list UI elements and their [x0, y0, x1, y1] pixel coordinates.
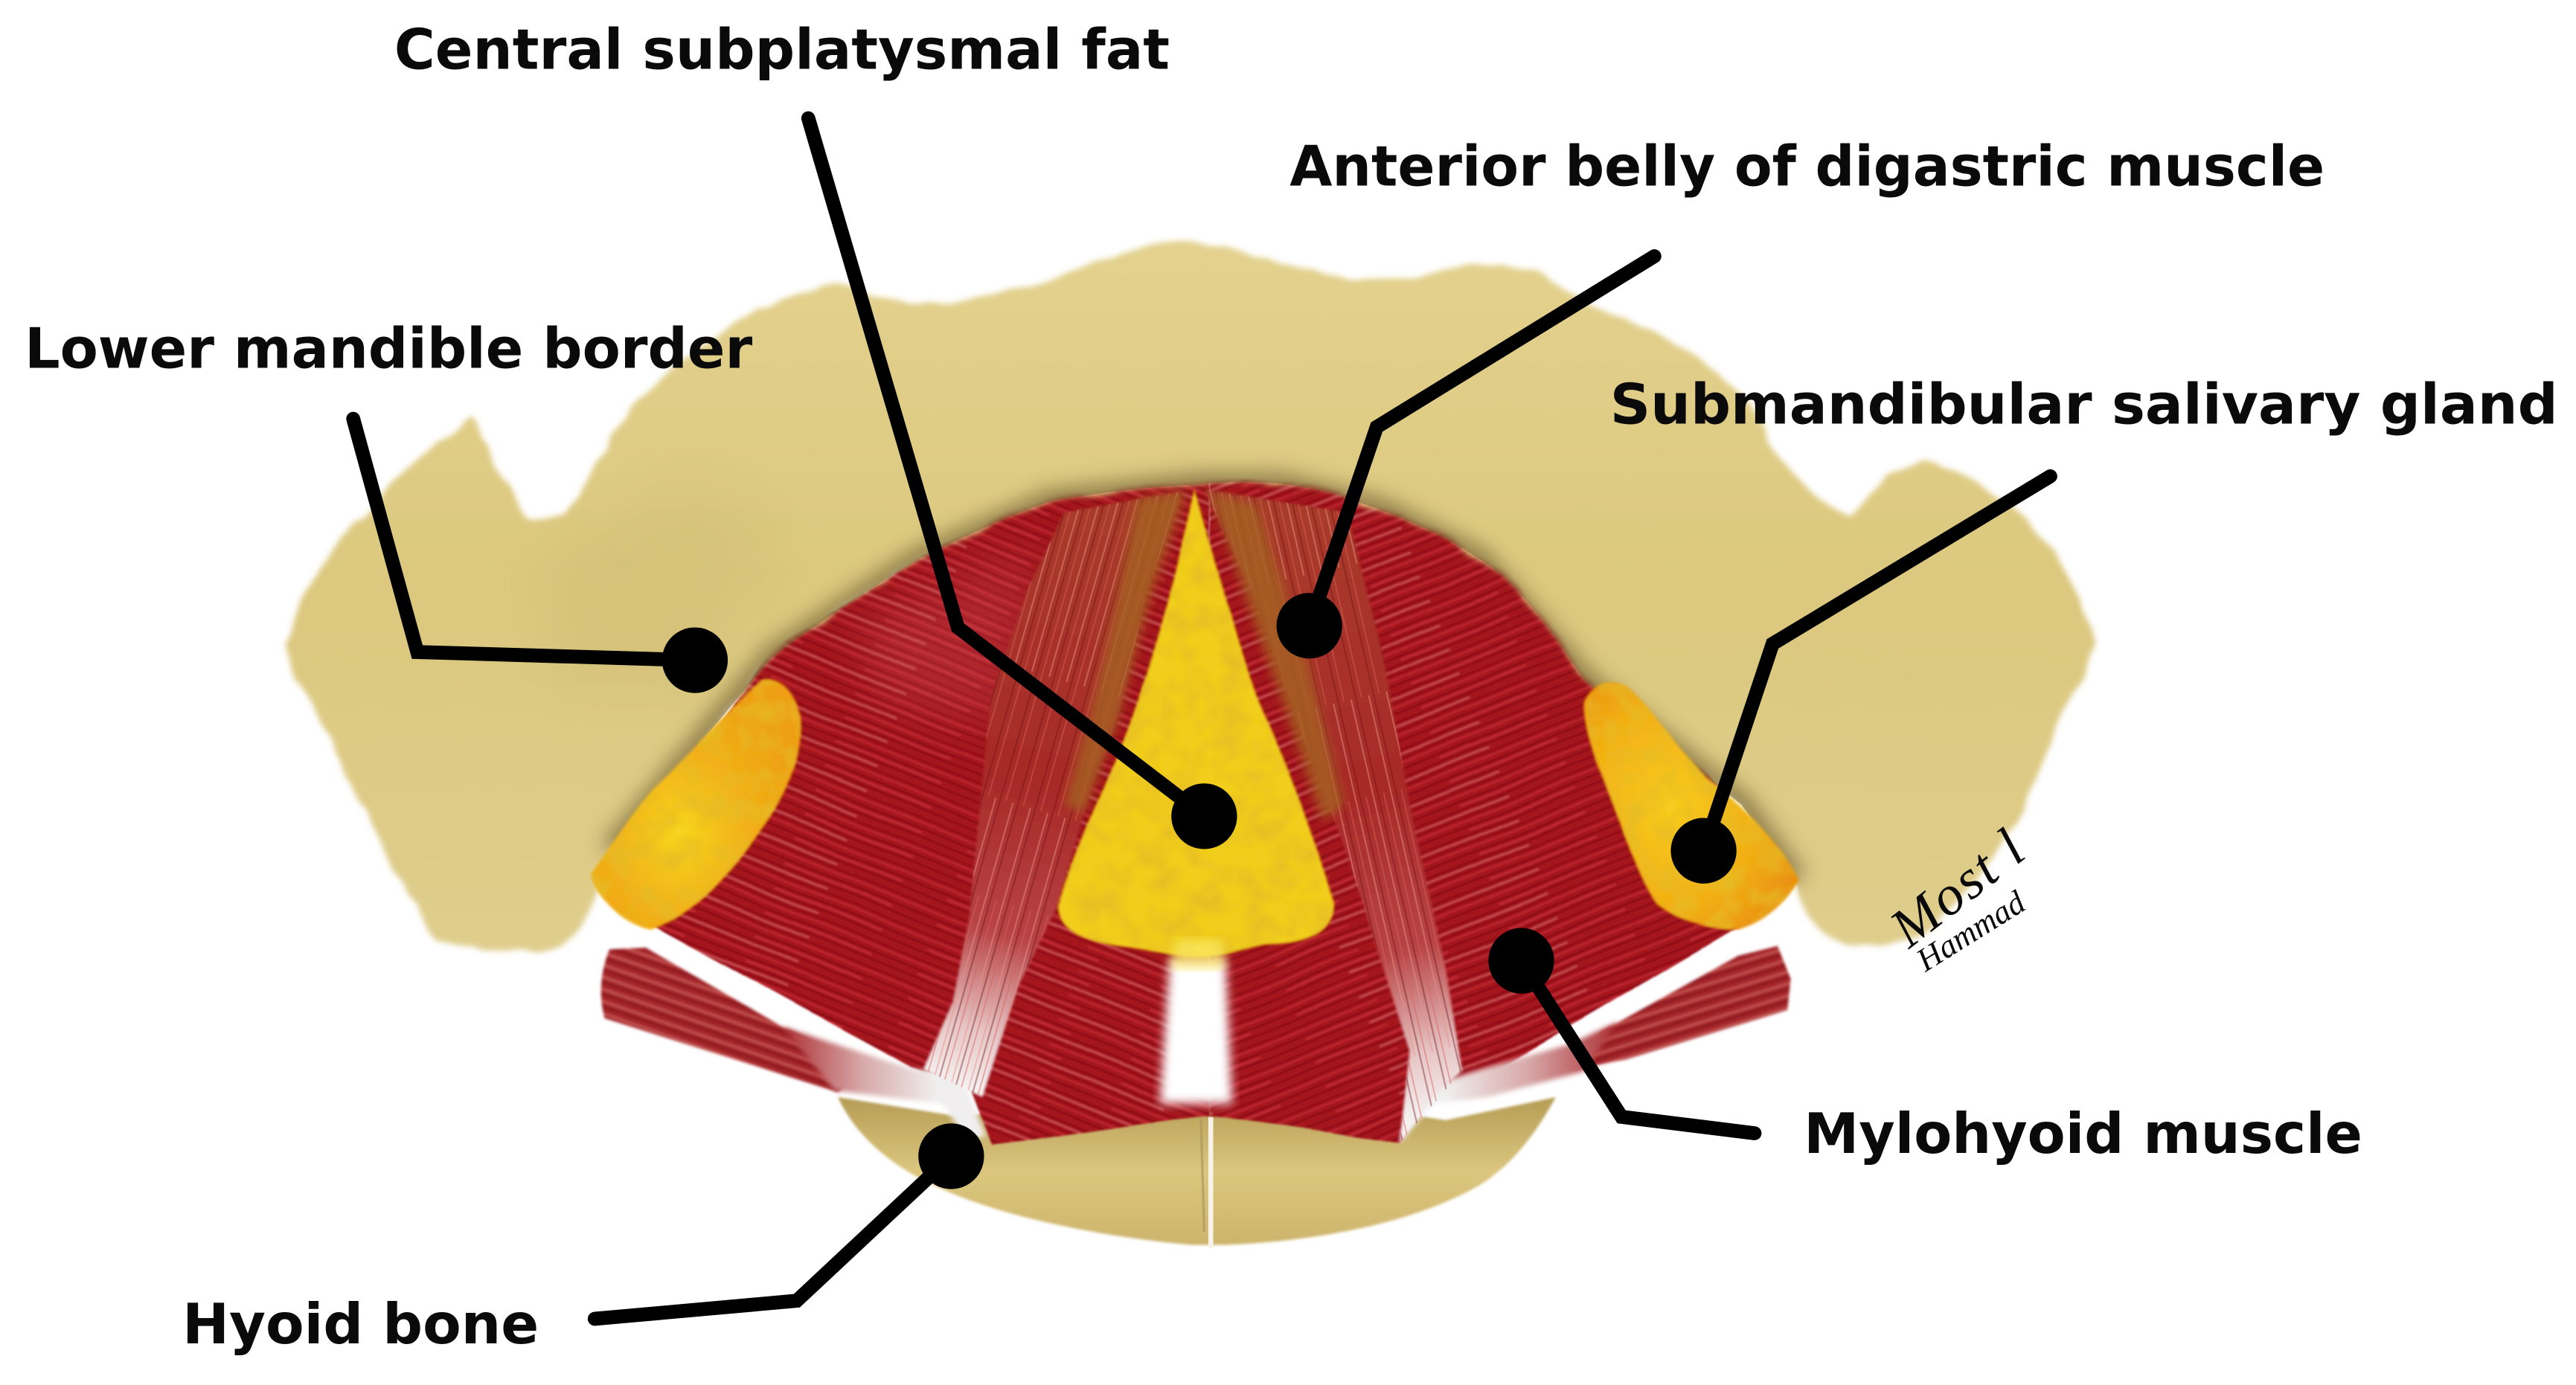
signature: Hammad	[1909, 884, 2032, 979]
label: lower mandible border: Lower mandible border	[25, 316, 752, 382]
label: mylohyoid muscle: Mylohyoid muscle	[1804, 1101, 2362, 1166]
leader: lower mandible border	[353, 419, 728, 693]
left belly	[923, 491, 1183, 1097]
label: submandibular salivary gland: Submandibular salivary gland	[1610, 372, 2558, 437]
stylohyoid and posterior digastric	[601, 946, 1791, 1143]
label: hyoid bone: Hyoid bone	[182, 1291, 539, 1357]
right belly	[1204, 489, 1462, 1143]
right submandibular gland	[1583, 683, 1799, 930]
midline raphe	[1160, 959, 1232, 1104]
anterior digastric bellies	[923, 489, 1462, 1143]
leader: hyoid bone	[595, 1123, 984, 1319]
leader: central subplatysmal fat	[808, 118, 1237, 849]
central subplatysmal fat	[1058, 489, 1334, 969]
right mylohyoid	[1209, 476, 1783, 1143]
left posterior digastric	[601, 948, 871, 1092]
leader: submandibular salivary gland	[1670, 476, 2050, 884]
muscle highlights	[854, 542, 1035, 723]
mandible bone	[284, 242, 2096, 951]
left submandibular gland	[592, 680, 801, 930]
leader: mylohyoid muscle	[1488, 928, 1755, 1134]
leader: anterior belly of digastric muscle	[1277, 256, 1654, 658]
label: central subplatysmal fat: Central subplatysmal fat	[394, 17, 1170, 83]
left tendon	[782, 1026, 986, 1140]
hyoid bone	[838, 1097, 1556, 1248]
right tendon	[1400, 1021, 1618, 1143]
left mylohyoid	[611, 476, 1209, 1145]
right posterior digastric	[1569, 946, 1791, 1071]
label: anterior belly of digastric muscle: Anterior belly of digastric muscle	[1289, 134, 2325, 199]
signature: Most l	[1878, 817, 2036, 960]
mylohyoid muscle	[611, 476, 1783, 1145]
